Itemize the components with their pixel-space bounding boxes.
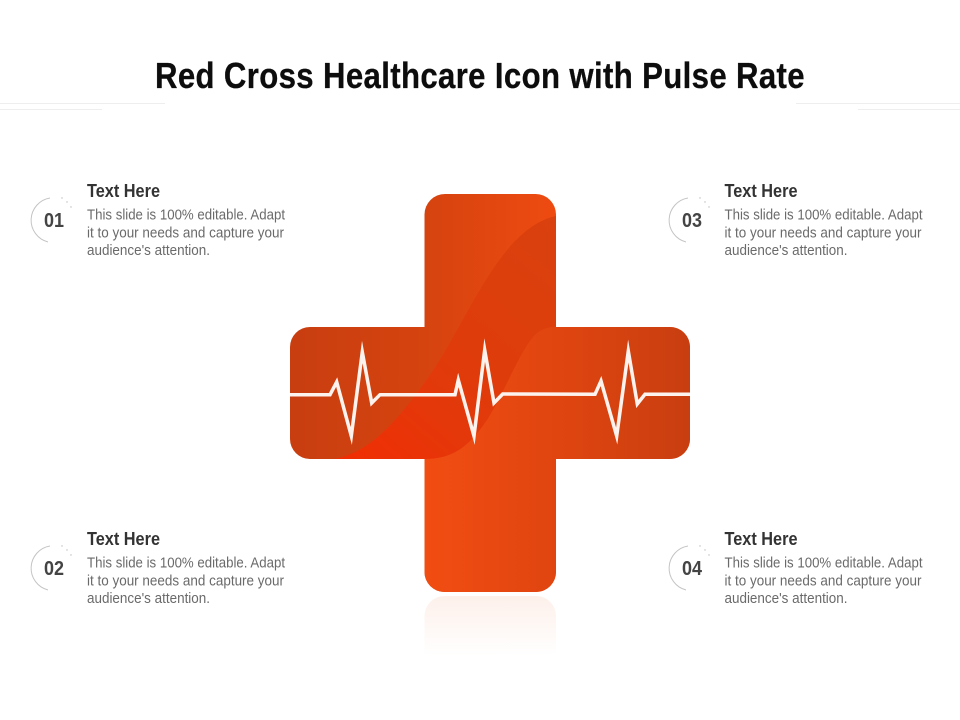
header rule: right — [796, 104, 960, 110]
panel: item 02 — [31, 529, 285, 607]
icon: red cross — [290, 194, 690, 600]
body text 03 — [724, 208, 922, 259]
title: Red Cross Healthcare Icon with Pulse Rate — [155, 57, 805, 97]
number badge 04 — [669, 545, 710, 590]
cross reflection — [424, 596, 556, 656]
number badge 02: 02 — [44, 558, 64, 580]
header rule: left — [0, 104, 165, 110]
body text 02: This slide is 100% editable. Adapt — [87, 556, 285, 572]
body text 03: audience's attention. — [724, 243, 848, 259]
number badge 01 — [31, 197, 72, 242]
body text 01: it to your needs and capture your — [87, 226, 284, 242]
cross base — [290, 194, 690, 600]
body text 01 — [87, 208, 285, 259]
body text 03: This slide is 100% editable. Adapt — [724, 208, 922, 224]
heading 01: Text Here — [87, 181, 160, 201]
body text 01: audience's attention. — [87, 243, 210, 259]
body text 02: audience's attention. — [87, 591, 210, 607]
cross lower wave layer — [424, 326, 690, 600]
panel: item 04 — [669, 529, 922, 607]
number badge 03 — [669, 197, 710, 242]
number badge 01: 01 — [44, 210, 64, 232]
body text 03: it to your needs and capture your — [724, 226, 922, 242]
body text 02 — [87, 556, 285, 607]
body text 04: audience's attention. — [724, 591, 848, 607]
panel: item 01 — [31, 181, 285, 259]
heading 02: Text Here — [87, 529, 160, 549]
body text 04 — [724, 556, 922, 607]
panel: item 03 — [669, 181, 922, 259]
pulse line — [290, 350, 690, 436]
body text 02: it to your needs and capture your — [87, 574, 284, 590]
number badge 04: 04 — [682, 558, 703, 580]
body text 04: This slide is 100% editable. Adapt — [724, 556, 922, 572]
body text 04: it to your needs and capture your — [724, 574, 922, 590]
heading 04: Text Here — [724, 529, 798, 549]
cross middle wave band — [334, 216, 556, 470]
body text 01: This slide is 100% editable. Adapt — [87, 208, 285, 224]
number badge 02 — [31, 545, 72, 590]
number badge 03: 03 — [682, 210, 702, 232]
heading 03: Text Here — [724, 181, 798, 201]
